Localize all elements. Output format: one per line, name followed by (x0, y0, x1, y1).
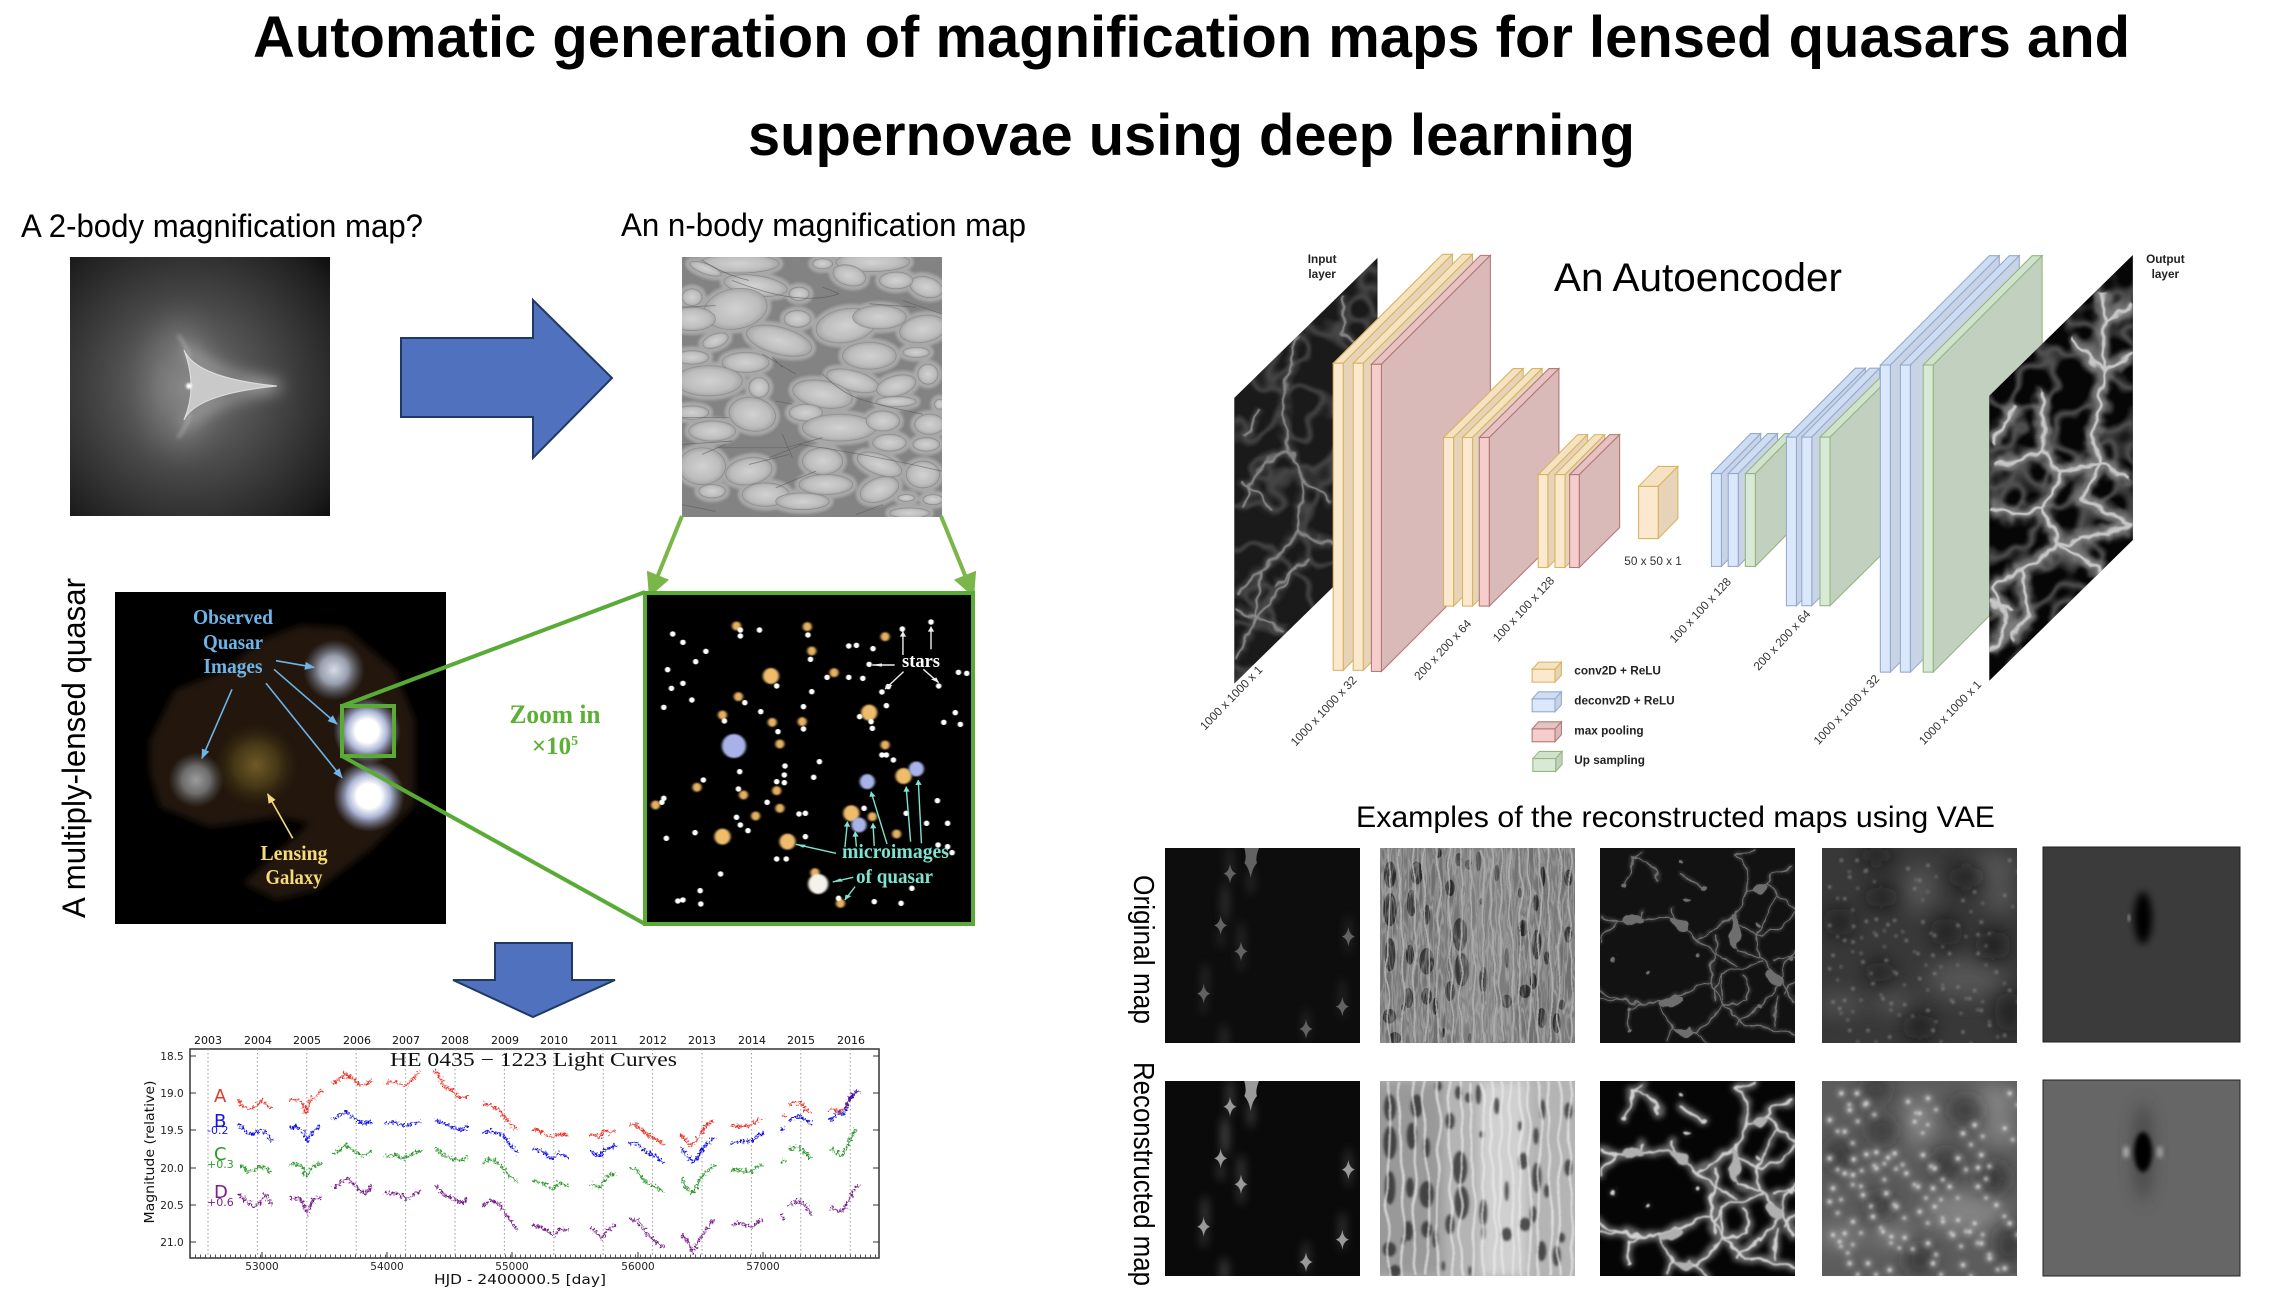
labels: lensing galaxy: Lensing (260, 841, 328, 865)
label: zoom in factor: Zoom in (510, 700, 601, 729)
legend: conv2D (1532, 662, 1661, 682)
x tick labels: 53000 (245, 1261, 279, 1273)
labels: observed quasar images: Quasar (203, 630, 263, 654)
original map 1: sparse stars (1165, 848, 1360, 1043)
white stars (662, 622, 967, 904)
legend (1532, 662, 1675, 771)
year lines and labels: 2004 (244, 1034, 272, 1047)
dimension labels: encoder: 1000 x 1000 x 32 (1288, 674, 1359, 749)
label: input layer: layer (1308, 268, 1336, 281)
series labels: D (214, 1182, 228, 1203)
series labels: +0.6 (207, 1196, 234, 1209)
original map 5: single lens (2043, 847, 2240, 1042)
x tick labels (245, 1261, 780, 1273)
rotated label: A multiply-lensed quasar: A multiply-lensed quasar (56, 578, 92, 918)
image: n-body magnification map (650, 257, 942, 572)
heading: 2-body map: A 2-body magnification map? (21, 208, 423, 244)
blue microimages (734, 746, 916, 884)
y axis title: Magnitude (relative) (142, 1080, 158, 1224)
legend: up sampling (1533, 751, 1645, 771)
year lines and labels: 2009 (491, 1034, 519, 1047)
legend: deconv2D: deconv2D + ReLU (1574, 694, 1675, 707)
reconstructed map 2: blurred web (1380, 1081, 1575, 1276)
labels: lensing galaxy: Galaxy (266, 865, 323, 889)
label: microimages of quasar: microimages (842, 841, 949, 863)
title: supernovae using deep learning (748, 103, 1635, 168)
dimension labels: encoder: 100 x 100 x 128 (1491, 574, 1557, 645)
year lines and labels: 2008 (441, 1034, 469, 1047)
label: zoom in factor: 5 (571, 734, 578, 749)
deconv block stack 100 x 100 (1711, 434, 1795, 566)
original map 3: caustic network (1600, 848, 1795, 1043)
panel: microimages of the quasar (645, 593, 973, 924)
reconstructed map 3: blurred network (1600, 1081, 1795, 1276)
label: zoom in factor: ×10 (532, 733, 571, 760)
year lines and labels: 2016 (837, 1034, 865, 1047)
conv block stack 200 x 200 (1444, 369, 1559, 606)
reconstructed map 4: smooth spots (1822, 1081, 2017, 1276)
curve: A (red) (238, 1070, 858, 1147)
deconv block stack 1000 x 1000 (1880, 256, 2042, 672)
dimension labels: encoder: 50 x 50 x 1 (1624, 555, 1682, 568)
input layer image (1234, 258, 1377, 684)
x tick labels: 57000 (746, 1261, 780, 1273)
original map 2: dense web (1380, 848, 1575, 1043)
dimension labels: encoder (1198, 555, 1734, 749)
conv block stack 100 x 100 (1538, 435, 1620, 567)
axis ticks (190, 1056, 879, 1258)
year lines and labels: 2003 (194, 1034, 222, 1047)
dimension labels: decoder: 1000 x 1000 x 1 (1917, 678, 1984, 747)
legend: conv2D: conv2D + ReLU (1574, 665, 1661, 678)
zoom selection box (342, 706, 394, 756)
heading: n-body map: An n-body magnification map (621, 207, 1026, 243)
curve: C (green) (241, 1130, 859, 1193)
label: zoom in factor (510, 700, 601, 760)
year lines and labels: 2012 (639, 1034, 667, 1047)
arrow: 2-body to n-body (401, 300, 612, 458)
title: Automatic generation of magnification maps for lensed quasars and (253, 5, 2130, 70)
label: output layer: Output (2146, 253, 2185, 266)
arrows: stars (872, 627, 939, 689)
series labels: C (214, 1144, 227, 1165)
connector: n-body map to microimage panel (652, 516, 971, 590)
x axis title: HJD - 2400000.5 [day] (434, 1272, 606, 1288)
heading: An Autoencoder: An Autoencoder (1554, 256, 1842, 300)
x tick labels: 55000 (495, 1261, 529, 1273)
year lines and labels (194, 1034, 865, 1258)
series labels (207, 1086, 234, 1209)
original map 4: smooth spots (1822, 848, 2017, 1043)
chart title: HE 0435 − 1223 Light Curves (390, 1049, 677, 1071)
dimension labels: encoder: 100 x 100 x 128 (1667, 575, 1734, 646)
diagram: encoder half (1198, 253, 1734, 771)
zoom connector lines (342, 592, 645, 924)
reconstructed map 1: sparse stars (1165, 1081, 1360, 1276)
y tick labels (160, 1051, 184, 1249)
series labels: +0.3 (207, 1158, 234, 1171)
y tick labels: 21.0 (160, 1237, 184, 1249)
title (253, 5, 2130, 168)
labels: observed quasar images (193, 605, 273, 678)
dimension labels: decoder (1751, 607, 1984, 747)
dimension labels: decoder: 200 x 200 x 64 (1751, 607, 1814, 673)
bottleneck block (1639, 466, 1678, 539)
legend: max pooling (1532, 722, 1644, 742)
arrows: observed quasar images (202, 661, 342, 778)
series labels: -0.2 (207, 1124, 228, 1137)
legend: up sampling: Up sampling (1574, 754, 1645, 767)
y tick labels: 18.5 (160, 1051, 184, 1063)
image: 2-body magnification map (70, 257, 330, 516)
x tick labels: 56000 (621, 1261, 655, 1273)
heading: examples of the reconstructed maps: Examples of the reconstructed maps using VAE (1356, 801, 1995, 834)
curve: D (purple) (238, 1178, 859, 1252)
labels: observed quasar images: Observed (193, 605, 273, 629)
arrow: down to light curves (453, 943, 615, 1017)
x tick labels: 54000 (370, 1261, 404, 1273)
year lines and labels: 2007 (392, 1034, 420, 1047)
legend: max pooling: max pooling (1574, 724, 1644, 737)
label: stars: stars (902, 651, 940, 672)
orange microimages (655, 626, 904, 903)
year lines and labels: 2015 (787, 1034, 815, 1047)
output layer image (1989, 255, 2133, 681)
label: output layer: layer (2152, 268, 2180, 281)
year lines and labels: 2005 (293, 1034, 321, 1047)
deconv block stack 200 x 200 (1786, 368, 1900, 606)
year lines and labels: 2013 (688, 1034, 716, 1047)
diagram: decoder half (1711, 253, 2185, 747)
image: multiply-lensed quasar (115, 592, 446, 924)
year lines and labels: 2006 (343, 1034, 371, 1047)
y tick labels: 19.0 (160, 1088, 184, 1100)
year lines and labels: 2011 (590, 1034, 618, 1047)
rotated label: Original map: Original map (1127, 875, 1159, 1024)
y tick labels: 20.5 (160, 1200, 184, 1212)
label: microimages of quasar: of quasar (856, 866, 933, 888)
y tick labels: 20.0 (160, 1163, 184, 1175)
labels: observed quasar images: Images (204, 654, 262, 678)
dimension labels: encoder: 1000 x 1000 x 1 (1198, 664, 1265, 733)
labels: lensing galaxy (260, 841, 328, 889)
label: output layer (2146, 253, 2185, 281)
year lines and labels: 2014 (738, 1034, 766, 1047)
legend: deconv2D (1532, 692, 1675, 712)
curve: B (blue) (238, 1090, 858, 1163)
dimension labels: encoder: 200 x 200 x 64 (1412, 617, 1474, 683)
series labels: A (214, 1086, 227, 1107)
arrow: lensing galaxy (268, 794, 293, 838)
series labels: B (214, 1111, 226, 1132)
year lines and labels: 2010 (540, 1034, 568, 1047)
dimension labels: decoder: 1000 x 1000 x 32 (1811, 673, 1882, 747)
chart: HE 0435-1223 light curves (142, 1034, 879, 1288)
label: microimages of quasar (842, 841, 949, 888)
y tick labels: 19.5 (160, 1125, 184, 1137)
reconstructed map 5: single lens (2043, 1080, 2240, 1276)
label: input layer (1308, 253, 1337, 281)
conv block stack 1000 x 1000 (1333, 254, 1490, 671)
arrows: microimages (796, 780, 921, 900)
label: input layer: Input (1308, 253, 1337, 266)
